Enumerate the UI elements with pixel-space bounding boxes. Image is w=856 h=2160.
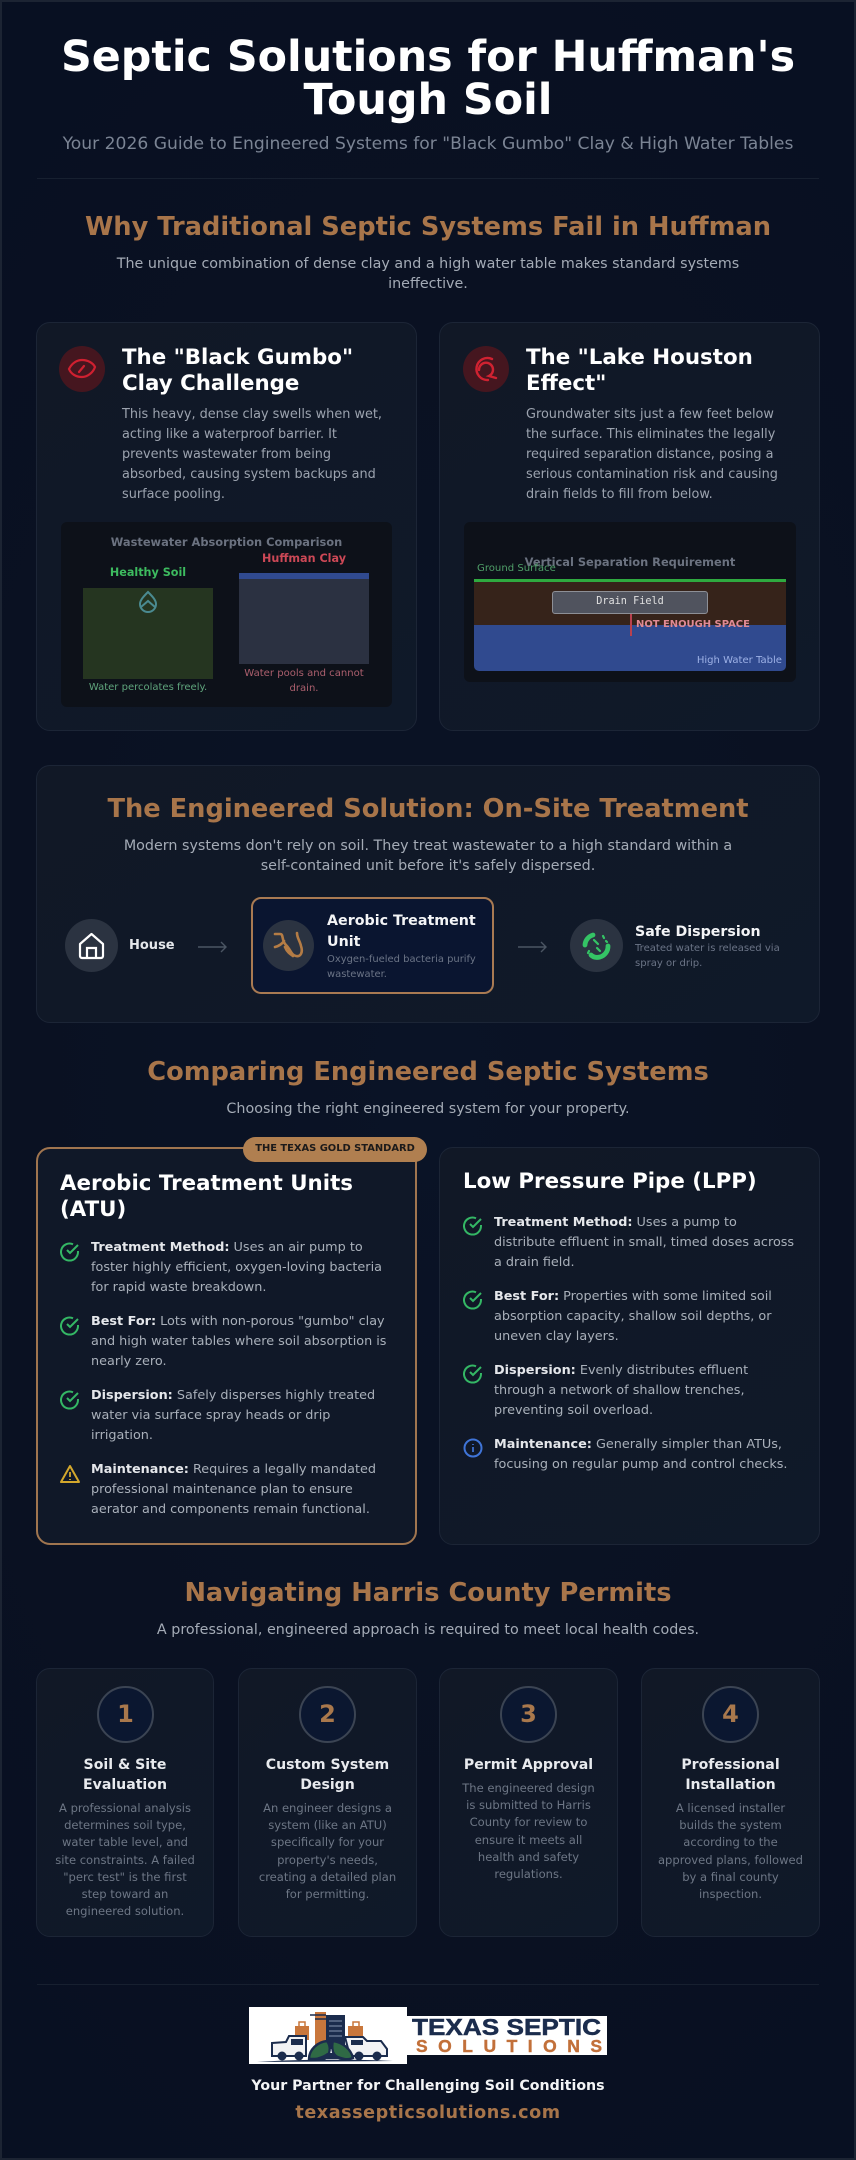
step description: step toward an — [82, 1887, 168, 1901]
text: treatment method: for rapid waste breakdown. — [91, 1280, 266, 1295]
heading: black gumbo: The "Black Gumbo" — [122, 345, 353, 370]
step title — [239, 1755, 416, 1795]
panel: low pressure pipe — [439, 1147, 820, 1545]
text: best for: nearly zero. — [91, 1354, 167, 1369]
heading: ATU: Aerobic Treatment Units — [60, 1171, 353, 1196]
logo: texas septic solutions — [249, 2007, 607, 2064]
text: maintenance — [494, 1435, 788, 1475]
step description: County for review to — [470, 1815, 587, 1829]
icon: check — [60, 1390, 79, 1410]
step description: for permitting. — [286, 1887, 369, 1901]
heading: black gumbo: Clay Challenge — [122, 371, 299, 396]
icon: bacteria — [263, 920, 314, 971]
list item: dispersion — [463, 1363, 748, 1418]
text: black gumbo description: absorbed, causing system backups and — [122, 467, 376, 482]
step title: Custom System — [266, 1757, 389, 1773]
title: Tough Soil — [304, 75, 552, 125]
red separation marker — [630, 614, 632, 636]
step title — [37, 1755, 213, 1795]
label: house: House — [129, 938, 175, 953]
chart title: Vertical Separation Requirement — [525, 555, 735, 569]
text: best for: Best For: Lots with non-porous "gumbo" clay — [91, 1314, 385, 1329]
soil layer — [474, 579, 786, 625]
step number 4: 4 — [722, 1700, 739, 1728]
text: lake houston description: the surface. This eliminates the legally — [526, 427, 775, 442]
text: treatment method: Treatment Method: Uses an air pump to — [91, 1240, 363, 1255]
step description — [239, 1800, 416, 1903]
step number 3 — [500, 1686, 557, 1743]
step description — [37, 1800, 213, 1920]
chart: vertical separation — [464, 522, 796, 682]
heading: LPP: Low Pressure Pipe (LPP) — [463, 1169, 757, 1194]
step description: A licensed installer — [676, 1801, 785, 1815]
step description: engineered solution. — [66, 1904, 184, 1918]
heading: ATU — [60, 1171, 353, 1222]
icon: check — [60, 1316, 79, 1336]
badge: texas gold standard: THE TEXAS GOLD STANDARD — [255, 1143, 415, 1154]
caption: aerobic treatment unit: Oxygen-fueled bacteria purify — [327, 954, 476, 965]
label: aerobic treatment unit: Aerobic Treatment — [327, 913, 476, 929]
step description: according to the — [683, 1835, 778, 1849]
aerobic treatment unit box — [251, 897, 494, 994]
text: best for — [494, 1289, 772, 1344]
list item: best for — [60, 1314, 386, 1369]
caption: healthy soil: Water percolates freely. — [89, 682, 207, 693]
subtitle: Your 2026 Guide to Engineered Systems for "Black Gumbo" Clay & High Water Tables — [63, 134, 793, 154]
arrow: treatment to dispersion — [518, 942, 547, 952]
title: Septic Solutions for Huffman's — [61, 32, 795, 82]
chart title: Wastewater Absorption Comparison — [111, 535, 342, 549]
text: treatment method: Treatment Method: Uses a pump to — [494, 1215, 737, 1230]
badge: texas gold standard — [243, 1137, 427, 1162]
text: treatment method — [494, 1215, 794, 1270]
drain field — [552, 591, 708, 614]
panel: engineered solution — [36, 765, 820, 1023]
step description: creating a detailed plan — [259, 1870, 396, 1884]
icon: red eye — [59, 346, 105, 392]
list item: treatment method — [463, 1215, 794, 1270]
text: dispersion: Dispersion: Evenly distributes effluent — [494, 1363, 748, 1378]
text: treatment method: a drain field. — [494, 1255, 575, 1270]
step description: ensure it meets all — [475, 1833, 582, 1847]
panel: step 2 — [238, 1668, 417, 1937]
step number 1: 1 — [117, 1700, 134, 1728]
label: high water table: High Water Table — [697, 655, 782, 666]
water table layer — [474, 625, 786, 671]
text: treatment method — [91, 1240, 382, 1295]
step description: A professional analysis — [59, 1801, 191, 1815]
step description — [440, 1780, 617, 1883]
text: maintenance: aerator and components remain functional. — [91, 1502, 370, 1517]
text: black gumbo description — [122, 407, 382, 502]
step title: Installation — [685, 1777, 776, 1793]
text: black gumbo description: acting like a waterproof barrier. It — [122, 427, 337, 442]
step description — [642, 1800, 819, 1903]
panel: step 1 — [36, 1668, 214, 1937]
text: maintenance: Maintenance: Requires a legally mandated — [91, 1462, 376, 1477]
heading: lake houston: Effect" — [526, 371, 606, 396]
text: best for: and high water tables where soil absorption is — [91, 1334, 386, 1349]
icon: red spiral — [463, 346, 509, 392]
step title — [642, 1755, 819, 1795]
caption: aerobic treatment unit — [327, 954, 476, 980]
list item: treatment method — [60, 1240, 382, 1295]
step description: system (like an ATU) — [268, 1818, 387, 1832]
intro text: engineered solution — [124, 838, 732, 874]
drain field: Drain Field — [596, 596, 664, 607]
text: lake houston description: required separation distance, posing a — [526, 447, 773, 462]
intro text: permits: A professional, engineered approach is required to meet local health codes. — [157, 1622, 699, 1638]
icon: water drop — [139, 590, 157, 613]
text: dispersion: irrigation. — [91, 1428, 153, 1443]
label: ground surface: Ground Surface — [477, 563, 556, 574]
caption: safe dispersion — [635, 943, 780, 968]
text: lake houston description: Groundwater sits just a few feet below — [526, 407, 774, 422]
step number 3: 3 — [520, 1700, 537, 1728]
caption: aerobic treatment unit: wastewater. — [327, 968, 387, 980]
text: best for — [91, 1314, 386, 1369]
step description: determines soil type, — [64, 1818, 186, 1832]
healthy soil block — [83, 588, 213, 679]
step description: "perc test" is the first — [63, 1870, 187, 1884]
label: aerobic treatment unit — [327, 913, 476, 950]
text: maintenance — [91, 1462, 376, 1517]
list item: maintenance — [463, 1434, 803, 1474]
text: dispersion — [91, 1388, 375, 1443]
logo wordmark line one: TEXAS SEPTIC — [412, 2014, 601, 2040]
intro text: why traditional systems fail — [116, 256, 739, 292]
chart: wastewater absorption comparison — [61, 522, 392, 707]
text: treatment method: distribute effluent in small, timed doses across — [494, 1235, 794, 1250]
logo wordmark line two: SOLUTIONS — [416, 2036, 602, 2056]
text: dispersion: water via surface spray heads or drip — [91, 1408, 330, 1423]
icon: house — [65, 919, 118, 972]
step description: property's needs, — [277, 1853, 378, 1867]
caption: huffman clay: drain. — [289, 682, 319, 694]
step description: builds the system — [679, 1818, 782, 1832]
step title: Design — [300, 1777, 355, 1793]
text: maintenance: focusing on regular pump and control checks. — [494, 1457, 788, 1472]
panel: aerobic treatment units — [36, 1147, 417, 1545]
step description: An engineer designs a — [263, 1801, 392, 1815]
icon: info — [463, 1438, 483, 1458]
step description: is submitted to Harris — [466, 1798, 591, 1812]
label: healthy soil: Healthy Soil — [110, 566, 186, 579]
step title: Soil & Site — [84, 1757, 166, 1773]
text: best for: uneven clay layers. — [494, 1329, 619, 1344]
caption: safe dispersion: spray or drip. — [635, 958, 702, 968]
icon: warning — [60, 1465, 80, 1483]
text: maintenance: Maintenance: Generally simpler than ATUs, — [494, 1437, 782, 1452]
tagline: Your Partner for Challenging Soil Conditions — [251, 2078, 605, 2094]
intro text: why traditional systems fail: The unique combination of dense clay and a high water table makes standard systems — [117, 256, 739, 272]
step description: inspection. — [699, 1887, 762, 1901]
step title: Professional — [681, 1757, 780, 1773]
step number 1 — [97, 1686, 154, 1743]
step title: Evaluation — [83, 1777, 167, 1793]
heading: lake houston — [526, 345, 753, 396]
text: dispersion — [494, 1361, 748, 1421]
step description: health and safety — [478, 1850, 579, 1864]
step number 2 — [299, 1686, 356, 1743]
intro text: why traditional systems fail: ineffective. — [388, 276, 468, 292]
icon: check — [463, 1364, 482, 1384]
list item: maintenance — [60, 1462, 376, 1517]
icon: check — [463, 1290, 482, 1310]
panel: black gumbo clay challenge — [36, 322, 417, 731]
heading: black gumbo — [122, 345, 353, 396]
step description: site constraints. A failed — [55, 1853, 195, 1867]
panel: step 3 — [439, 1668, 618, 1937]
text: dispersion: through a network of shallow trenches, — [494, 1383, 745, 1398]
text: dispersion: Dispersion: Safely disperses highly treated — [91, 1388, 375, 1403]
text: lake houston description: drain fields to fill from below. — [526, 487, 713, 502]
clay block with pooled water — [239, 573, 369, 664]
step description: by a final county — [682, 1870, 779, 1884]
text: black gumbo description: This heavy, dense clay swells when wet, — [122, 407, 382, 422]
title — [61, 32, 795, 125]
label: safe dispersion: Safe Dispersion — [635, 924, 761, 940]
heading: engineered solution: The Engineered Solution: On-Site Treatment — [107, 794, 749, 824]
caption: huffman clay — [244, 668, 364, 694]
arrow: house to treatment — [198, 942, 227, 952]
step description: specifically for your — [271, 1835, 384, 1849]
list item: best for — [463, 1289, 772, 1344]
icon: check — [60, 1242, 79, 1262]
text: maintenance: professional maintenance plan to ensure — [91, 1482, 353, 1497]
label: aerobic treatment unit: Unit — [327, 934, 360, 950]
heading: permits: Navigating Harris County Permits — [184, 1578, 672, 1608]
step description: water table level, and — [62, 1835, 188, 1849]
text: lake houston description: serious contamination risk and causing — [526, 467, 778, 482]
text: best for: Best For: Properties with some limited soil — [494, 1289, 772, 1304]
icon: safe dispersion — [570, 919, 623, 972]
step description: regulations. — [494, 1867, 563, 1881]
caption: safe dispersion: Treated water is released via — [635, 943, 780, 954]
step number 2: 2 — [319, 1700, 336, 1728]
heading: comparing systems: Comparing Engineered Septic Systems — [147, 1057, 709, 1087]
text: best for: absorption capacity, shallow soil depths, or — [494, 1309, 772, 1324]
text: treatment method: foster highly efficient, oxygen-loving bacteria — [91, 1260, 382, 1275]
intro text: comparing systems: Choosing the right engineered system for your property. — [226, 1101, 630, 1117]
text: black gumbo description: prevents wastewater from being — [122, 447, 331, 462]
step number 4 — [702, 1686, 759, 1743]
heading: ATU: (ATU) — [60, 1197, 126, 1222]
panel: lake houston effect — [439, 322, 820, 731]
step description: approved plans, followed — [658, 1853, 803, 1867]
step title: Permit Approval — [464, 1757, 593, 1773]
heading: lake houston: The "Lake Houston — [526, 345, 753, 370]
panel: step 4 — [641, 1668, 820, 1937]
icon: check — [463, 1216, 482, 1236]
text: black gumbo description: surface pooling. — [122, 487, 225, 502]
text: lake houston description — [526, 407, 778, 502]
heading: why traditional systems fail: Why Traditional Septic Systems Fail in Huffman — [85, 212, 771, 242]
label: huffman clay: Huffman Clay — [262, 552, 346, 565]
text: dispersion: preventing soil overload. — [494, 1403, 653, 1418]
warning label: NOT ENOUGH SPACE — [636, 619, 750, 630]
website url: texassepticsolutions.com — [295, 2103, 561, 2123]
intro text: engineered solution: Modern systems don't rely on soil. They treat wastewater to a high standard within a — [124, 838, 732, 854]
intro text: engineered solution: self-contained unit before it's safely dispersed. — [261, 858, 595, 874]
caption: huffman clay: Water pools and cannot — [244, 668, 364, 679]
step description: The engineered design — [462, 1781, 595, 1795]
list item: dispersion — [60, 1388, 375, 1443]
